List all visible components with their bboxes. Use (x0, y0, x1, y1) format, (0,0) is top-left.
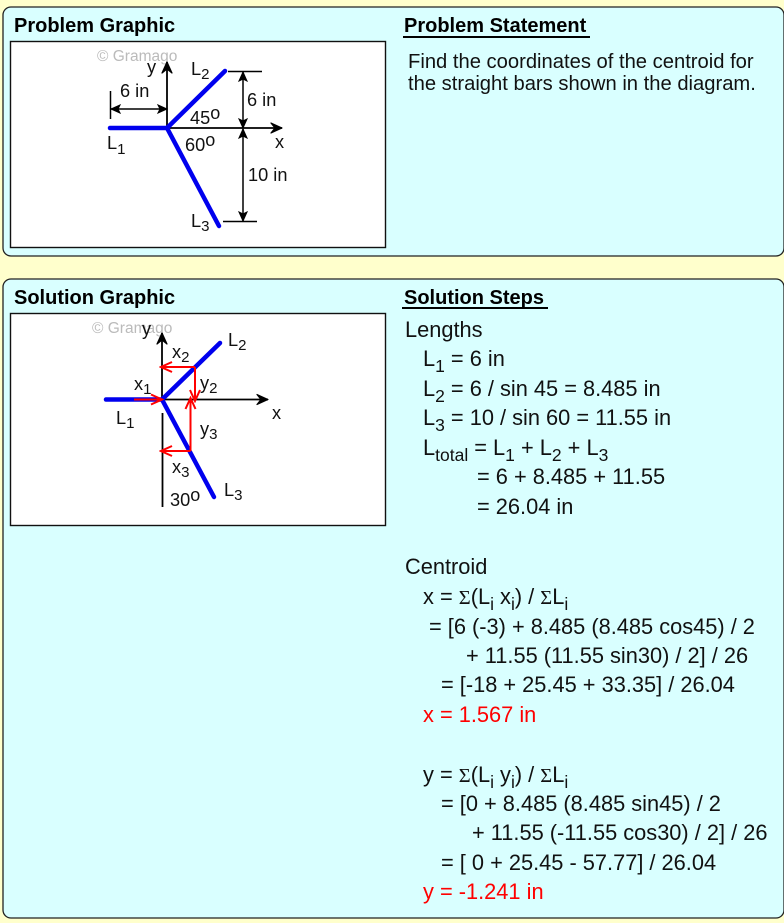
diagram labels: y (147, 57, 157, 77)
centroid x steps: i (511, 594, 515, 614)
diagram labels: y (200, 373, 209, 393)
centroid y steps (423, 762, 767, 904)
lengths steps: 1 (435, 356, 445, 376)
diagram labels: L (228, 330, 238, 350)
diagram labels: L (191, 211, 201, 231)
diagram labels: o (190, 485, 200, 505)
diagram labels: x (275, 132, 284, 152)
diagram labels: x (272, 403, 281, 423)
lengths steps: L (423, 405, 435, 430)
panel: solution (3, 279, 784, 918)
lengths steps: 3 (435, 415, 445, 435)
diagram labels: 45 (190, 108, 210, 128)
lengths steps: 2 (435, 386, 445, 406)
axes (162, 333, 268, 507)
centroid y steps: + 11.55 (-11.55 cos30) / 2] / 26 (472, 820, 767, 845)
diagram labels: L (107, 133, 117, 153)
diagram labels: 3 (181, 464, 189, 481)
lengths steps: + L (515, 435, 552, 460)
centroid y steps: ) / (515, 762, 540, 787)
diagram labels: L (191, 59, 201, 79)
lengths steps: L (423, 435, 435, 460)
diagram labels: 1 (117, 141, 125, 158)
diagram: problem graphic (10, 42, 386, 248)
centroid x steps: i (490, 594, 494, 614)
centroid x steps: x (494, 584, 511, 609)
centroid y steps: y = Σ(L (423, 762, 490, 787)
centroid x steps: i (564, 594, 568, 614)
centroid x steps (405, 554, 755, 727)
lengths steps: = 6 in (445, 346, 505, 371)
diagram: solution graphic (10, 314, 386, 526)
heading: problem statement: Problem Statement (404, 15, 587, 37)
diagram labels: 6 in (247, 90, 276, 110)
bars (106, 343, 220, 497)
centroid y steps: = [0 + 8.485 (8.485 sin45) / 2 (441, 791, 721, 816)
lengths steps: = 26.04 in (477, 494, 573, 519)
axes (167, 62, 282, 128)
diagram labels: L (224, 480, 234, 500)
lengths steps: 2 (552, 445, 562, 465)
watermark: © Gramago (97, 48, 177, 65)
lengths steps (405, 317, 671, 519)
red centroid arrows (134, 367, 195, 451)
diagram labels: 2 (201, 66, 209, 83)
centroid x steps: + 11.55 (11.55 sin30) / 2] / 26 (466, 643, 748, 668)
centroid x steps: ) / (515, 584, 540, 609)
centroid x steps: Centroid (405, 554, 487, 579)
centroid x steps: = [6 (-3) + 8.485 (8.485 cos45) / 2 (429, 614, 755, 639)
lengths steps: + L (562, 435, 599, 460)
centroid y steps: i (490, 772, 494, 792)
centroid y steps: i (564, 772, 568, 792)
centroid y steps: y (494, 762, 511, 787)
lengths steps: 1 (505, 445, 515, 465)
heading: problem graphic: Problem Graphic (14, 15, 175, 37)
diagram labels (107, 57, 287, 235)
lengths steps: L (423, 346, 435, 371)
lengths steps: 3 (599, 445, 608, 465)
lengths steps: L (423, 376, 435, 401)
diagram labels: y (142, 319, 152, 339)
centroid y steps: ΣL (540, 762, 564, 787)
problem statement text: the straight bars shown in the diagram. (408, 73, 756, 95)
diagram labels: y (200, 419, 209, 439)
diagram labels: 3 (234, 487, 242, 504)
centroid y steps: = [ 0 + 25.45 - 57.77] / 26.04 (441, 850, 716, 875)
centroid x steps: ΣL (540, 584, 564, 609)
diagram labels: x (172, 342, 181, 362)
centroid x steps: x = 1.567 in (423, 702, 536, 727)
centroid x steps: x = Σ(L (423, 584, 490, 609)
diagram labels: 30 (170, 490, 190, 510)
lengths steps: = 6 / sin 45 = 8.485 in (445, 376, 661, 401)
diagram labels: 6 in (120, 81, 149, 101)
lengths steps: total (435, 445, 468, 465)
panel: problem (3, 7, 784, 256)
heading: solution steps: Solution Steps (404, 287, 544, 309)
centroid y steps: y = -1.241 in (423, 879, 544, 904)
lengths steps: = L (468, 435, 505, 460)
diagram labels: 1 (143, 381, 151, 398)
diagram labels: 1 (126, 415, 134, 432)
diagram labels: 2 (181, 349, 189, 366)
diagram labels: L (116, 408, 126, 428)
problem statement text (408, 51, 756, 95)
lengths steps: = 6 + 8.485 + 11.55 (477, 464, 665, 489)
diagram labels: 3 (209, 426, 217, 443)
bars (110, 71, 225, 226)
lengths steps: = 10 / sin 60 = 11.55 in (445, 405, 671, 430)
diagram labels: x (134, 374, 143, 394)
diagram labels: 3 (201, 218, 209, 235)
diagram labels: 60 (185, 135, 205, 155)
lengths steps: Lengths (405, 317, 483, 342)
centroid x steps: = [-18 + 25.45 + 33.35] / 26.04 (441, 672, 735, 697)
diagram labels: o (210, 103, 220, 123)
diagram labels (116, 319, 281, 510)
heading: solution graphic: Solution Graphic (14, 287, 175, 309)
centroid y steps: i (511, 772, 515, 792)
diagram labels: 2 (209, 380, 217, 397)
diagram labels: 2 (238, 337, 246, 354)
problem statement text: Find the coordinates of the centroid for (408, 51, 754, 73)
watermark: © Gramago (92, 320, 172, 337)
diagram labels: o (205, 130, 215, 150)
diagram labels: x (172, 457, 181, 477)
dimension lines (110, 72, 262, 222)
diagram labels: 10 in (248, 165, 287, 185)
